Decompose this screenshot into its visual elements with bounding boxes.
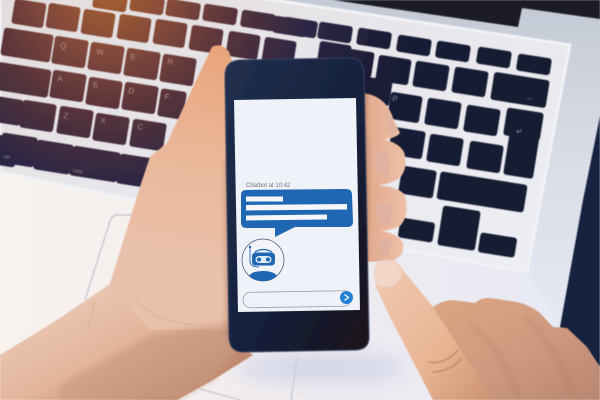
key legends: ↵ [516,127,523,136]
right hand [374,260,600,400]
laptop metal rim at upper right [280,0,600,325]
thumb and palm [110,45,236,330]
key legends: W [96,47,105,57]
key legends: cmd [73,168,83,175]
icon: send button [340,291,353,304]
fingers behind the phone [360,93,407,262]
back fingers [433,298,600,400]
key legends: Z [63,111,69,121]
palm lower shadow blending into the arm [60,320,240,400]
pointing finger [374,260,493,400]
shadow beside the phone [225,160,236,345]
key legends: C [137,122,144,132]
key legends: S [92,80,98,90]
key legends: ← [526,93,534,102]
key legends: Q [60,41,67,51]
finger nails [375,110,399,256]
phone screen [234,98,360,312]
phone shadow [235,354,405,382]
message line 3 [246,214,327,220]
key legends: X [100,116,107,126]
dark screen hinge [333,0,600,27]
phone body [225,58,369,352]
chat bubble [241,189,353,237]
key legends: P [392,94,398,104]
knuckle creases [428,350,462,372]
key legends: D [128,86,135,96]
left hand and forearm [0,45,253,400]
key legends: R [167,57,174,67]
key legends: E [130,52,136,62]
message line 1 [246,196,283,202]
message input field [243,291,351,308]
keyboard deck [0,0,570,272]
trackpad outline [85,215,297,400]
message line 2 [246,204,347,210]
fingernail [374,260,402,287]
chat timestamp: Chatbot at 10:42 [246,183,291,189]
icon: chatbot avatar [242,239,284,281]
key legends: ctrl [3,154,10,161]
knuckle shadow [470,318,575,400]
key legends: F [164,92,170,102]
keyboard keys [0,0,552,258]
key legends [3,41,534,175]
key legends: A [57,74,64,84]
dark desk corner [560,116,600,367]
